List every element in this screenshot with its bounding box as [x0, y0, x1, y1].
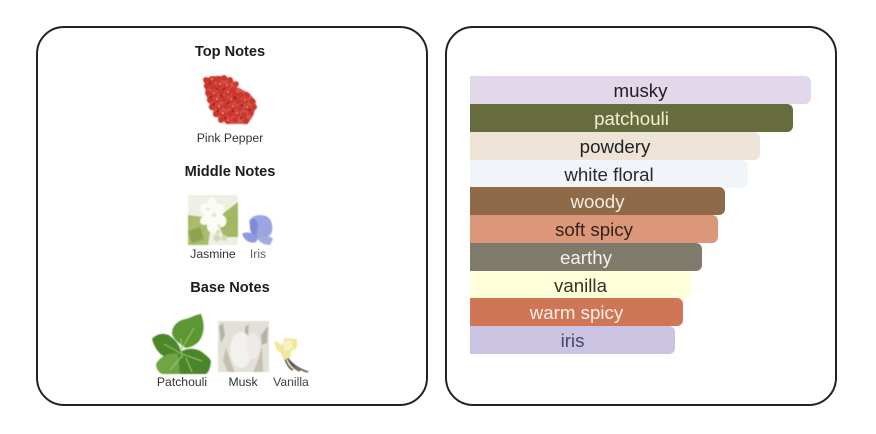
bar: vanilla: vanilla: [554, 275, 607, 296]
bar: powdery: [470, 132, 760, 160]
label: patchouli: Patchouli: [157, 375, 207, 389]
bar: patchouli: [470, 104, 793, 132]
panel: fragrance notes: [36, 26, 428, 406]
icon: vanilla: [274, 338, 309, 374]
bar: soft spicy: soft spicy: [555, 219, 633, 240]
icon: patchouli: [151, 313, 212, 375]
bar: musky: [470, 76, 811, 104]
heading: base notes: Base Notes: [190, 280, 270, 296]
bar: vanilla: [470, 271, 691, 299]
label: iris: Iris: [250, 247, 266, 261]
bar: woody: woody: [570, 191, 625, 212]
bar: powdery: powdery: [580, 136, 650, 157]
label: jasmine: Jasmine: [190, 247, 236, 261]
icon: jasmine: [187, 195, 239, 246]
heading: top notes: Top Notes: [195, 44, 265, 60]
label: pink pepper: Pink Pepper: [197, 131, 263, 145]
icon: iris: [242, 214, 274, 246]
panel: accords chart: [445, 26, 837, 406]
bar: musky: musky: [614, 80, 668, 101]
icon: musk: [218, 320, 270, 372]
label: vanilla: Vanilla: [273, 375, 309, 389]
bar: earthy: earthy: [560, 247, 612, 268]
bar: warm spicy: warm spicy: [530, 302, 623, 323]
bar: earthy: [470, 243, 702, 271]
bar: white floral: white floral: [564, 164, 654, 185]
bar chart: accords: [470, 76, 811, 354]
bar: iris: iris: [561, 330, 584, 351]
bar: soft spicy: [470, 215, 718, 243]
bar: white floral: [470, 160, 748, 188]
heading: middle notes: Middle Notes: [185, 164, 275, 180]
bar: iris: [470, 326, 675, 354]
label: musk: Musk: [228, 375, 258, 389]
bar: woody: [470, 187, 725, 215]
bar: patchouli: patchouli: [594, 108, 669, 129]
bar: warm spicy: [470, 298, 683, 326]
icon: pink pepper: [202, 74, 258, 125]
